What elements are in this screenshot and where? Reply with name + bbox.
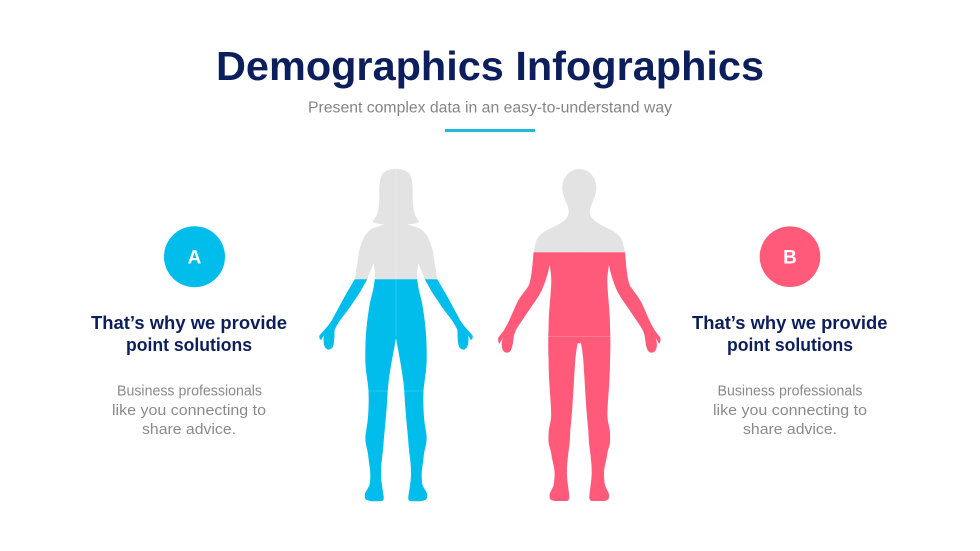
- body text B: share advice.: [743, 421, 837, 438]
- figure: man, pink fill below shoulders: [498, 169, 661, 501]
- body text A: like you connecting to: [112, 402, 266, 419]
- body text B: like you connecting to: [713, 402, 867, 419]
- heading A: point solutions: [126, 334, 252, 355]
- body text B: Business professionals: [718, 382, 862, 400]
- body text A: Business professionals: [117, 382, 262, 400]
- subtitle: Present complex data in an easy-to-understand way: [308, 100, 672, 116]
- heading B: point solutions: [727, 334, 853, 355]
- badge A: [164, 226, 225, 287]
- badge B: B: [783, 248, 797, 268]
- title underline accent: [445, 129, 535, 132]
- body text B: [713, 382, 867, 438]
- panel: A: [91, 226, 287, 438]
- body text A: share advice.: [142, 421, 236, 438]
- badge A: A: [188, 248, 202, 268]
- panel: B: [692, 226, 888, 438]
- heading A: [91, 312, 287, 355]
- heading A: That’s why we provide: [91, 312, 287, 333]
- title: Demographics Infographics: [216, 43, 764, 89]
- heading B: [692, 312, 888, 355]
- badge B: [760, 226, 820, 287]
- figure: woman, blue fill below waist: [319, 169, 473, 501]
- body text A: [112, 382, 266, 438]
- heading B: That’s why we provide: [692, 312, 888, 333]
